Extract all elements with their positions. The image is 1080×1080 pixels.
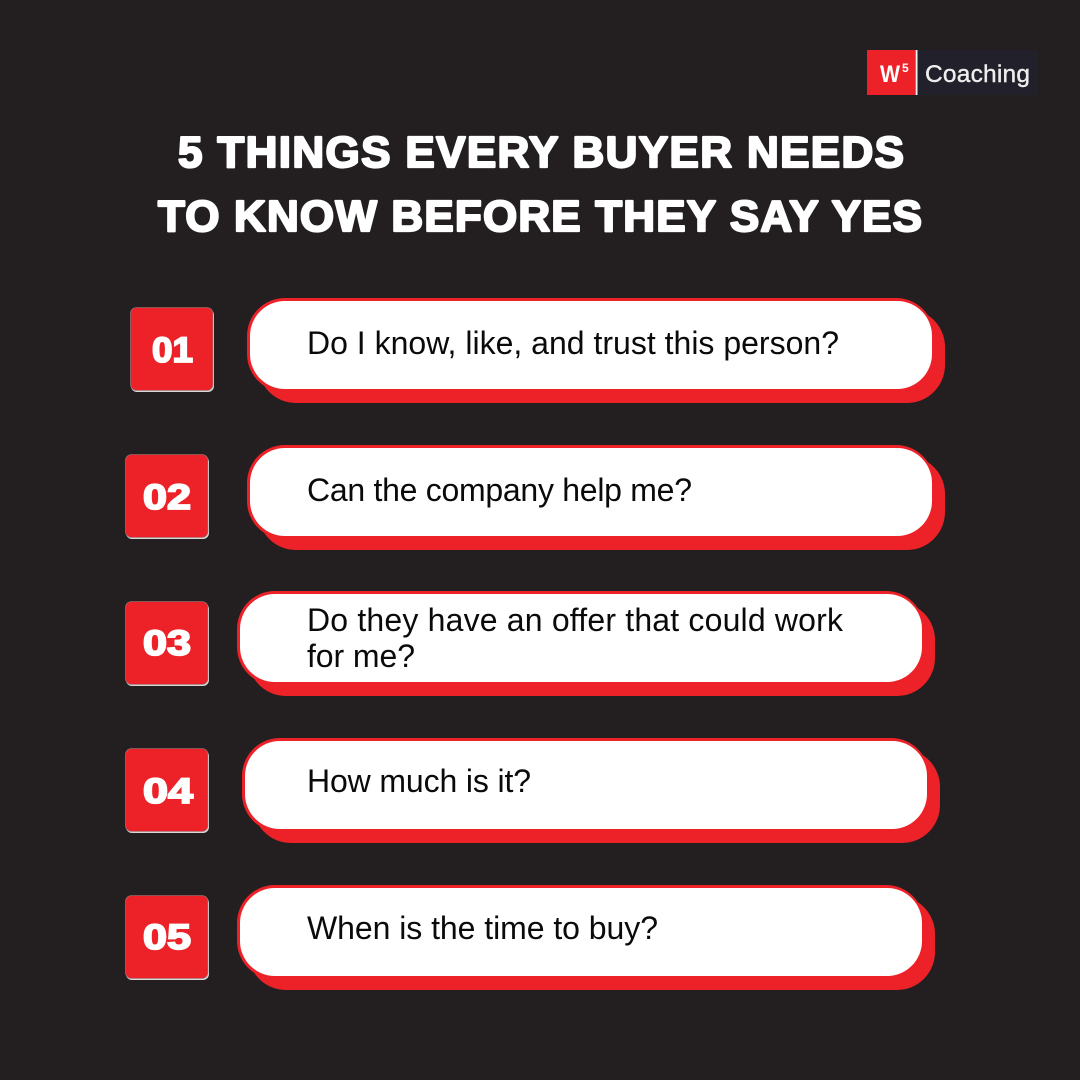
logo: W5 Coaching: Coaching <box>925 61 1030 88</box>
pill 1: Do I know, like, and trust this person? <box>307 325 839 361</box>
logo: W5 Coaching: 5 <box>902 61 909 75</box>
logo: W5 Coaching: W <box>880 61 900 88</box>
number badge 05: 05 <box>143 918 191 957</box>
pill 5: When is the time to buy? <box>307 910 658 946</box>
pill 4 <box>242 738 940 843</box>
item 5 <box>126 885 935 990</box>
logo: W5 Coaching <box>867 50 1038 95</box>
pill 1 <box>247 298 945 403</box>
number badge 05 <box>126 896 209 980</box>
number badge 01: 01 <box>152 331 193 370</box>
number badge 04: 04 <box>143 772 194 811</box>
number badge 04 <box>126 748 209 833</box>
number badge 03: 03 <box>143 624 191 663</box>
title: TO KNOW BEFORE THEY SAY YES <box>158 192 922 241</box>
pill 4: How much is it? <box>307 763 531 799</box>
pill 3 <box>237 591 935 696</box>
title <box>158 128 922 241</box>
number badge 01 <box>130 308 214 392</box>
item 4 <box>126 738 940 843</box>
pill 3: Do they have an offer that could work <box>307 602 844 638</box>
number badge 02 <box>126 454 209 539</box>
item 3 <box>126 591 935 696</box>
number badge 02: 02 <box>143 478 191 517</box>
number badge 03 <box>126 602 209 686</box>
pill 2 <box>247 445 945 550</box>
item 1 <box>130 298 945 403</box>
item 2 <box>126 445 945 550</box>
pill 2: Can the company help me? <box>307 472 692 508</box>
pill 5 <box>237 885 935 990</box>
pill 3: for me? <box>307 638 415 674</box>
title: 5 THINGS EVERY BUYER NEEDS <box>178 128 904 177</box>
